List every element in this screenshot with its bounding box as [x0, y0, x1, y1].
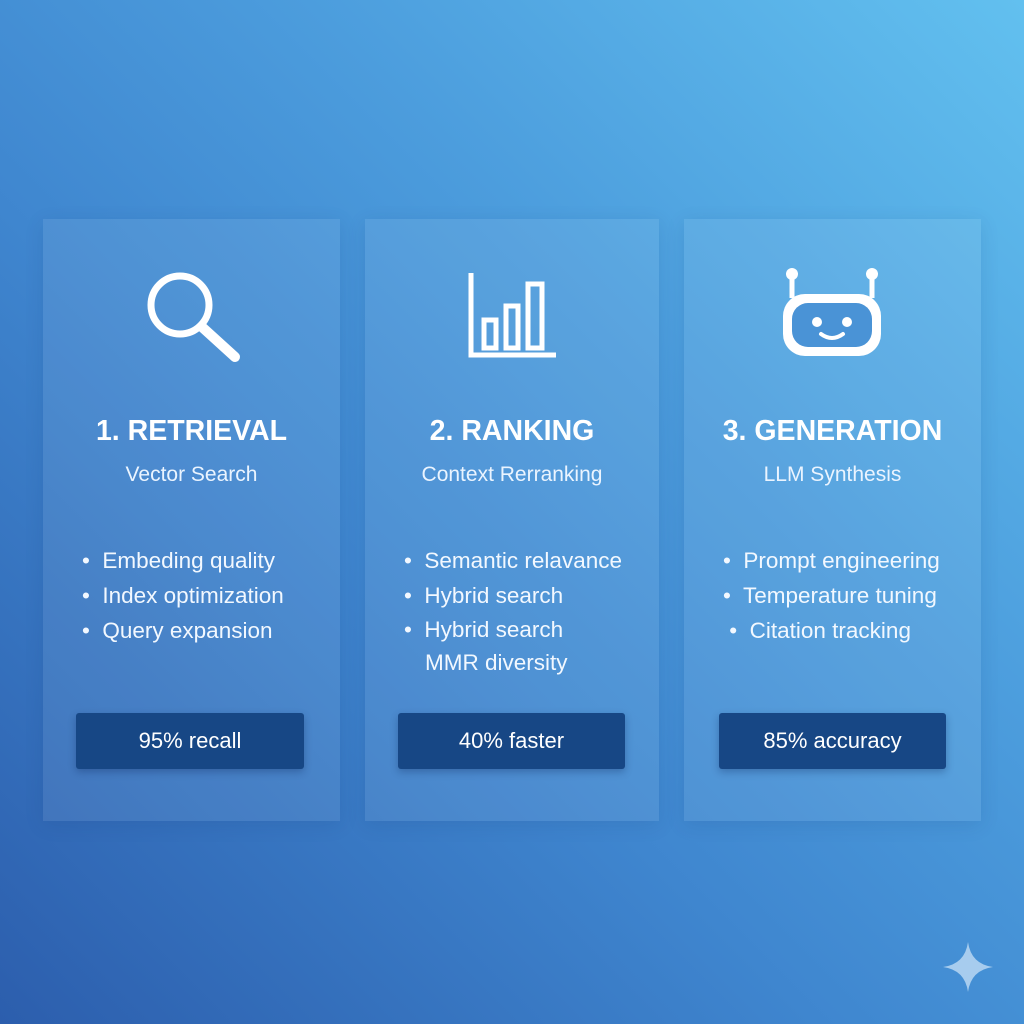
panel: retrieval	[43, 219, 340, 821]
heading: retrieval: 1. RETRIEVAL	[96, 415, 287, 447]
icon: sparkle	[943, 942, 993, 992]
subtitle: generation: LLM Synthesis	[764, 463, 901, 486]
bullets: retrieval: • Query expansion	[82, 618, 272, 643]
icon: bar chart	[468, 273, 556, 358]
subtitle: ranking: Context Rerranking	[422, 463, 602, 486]
bullets: ranking: • Hybrid search	[404, 583, 563, 608]
bullets: ranking: • Hybrid search	[404, 617, 563, 642]
bullets: ranking: • Semantic relavance	[404, 548, 622, 573]
bullets: ranking: MMR diversity	[425, 650, 568, 675]
heading: ranking: 2. RANKING	[430, 415, 594, 447]
button: 85% accuracy: 85% accuracy	[763, 728, 902, 753]
button: 40% faster	[398, 713, 625, 769]
icon: robot	[783, 268, 881, 356]
bullets: retrieval: • Embeding quality	[82, 548, 275, 573]
button: 95% recall: 95% recall	[139, 728, 241, 753]
button: 95% recall	[76, 713, 304, 769]
bullets: ranking	[404, 548, 622, 675]
panel: generation	[684, 219, 981, 821]
button: 85% accuracy	[719, 713, 946, 769]
button: 40% faster: 40% faster	[459, 728, 564, 753]
bullets: retrieval	[82, 548, 284, 643]
bullets: generation	[723, 548, 940, 643]
panel: ranking	[365, 219, 659, 821]
heading: generation: 3. GENERATION	[723, 415, 942, 447]
bullets: generation: • Citation tracking	[729, 618, 911, 643]
bullets: generation: • Temperature tuning	[723, 583, 937, 608]
icon: magnifier	[148, 272, 240, 362]
bullets: generation: • Prompt engineering	[723, 548, 940, 573]
bullets: retrieval: • Index optimization	[82, 583, 284, 608]
subtitle: retrieval: Vector Search	[126, 463, 257, 486]
